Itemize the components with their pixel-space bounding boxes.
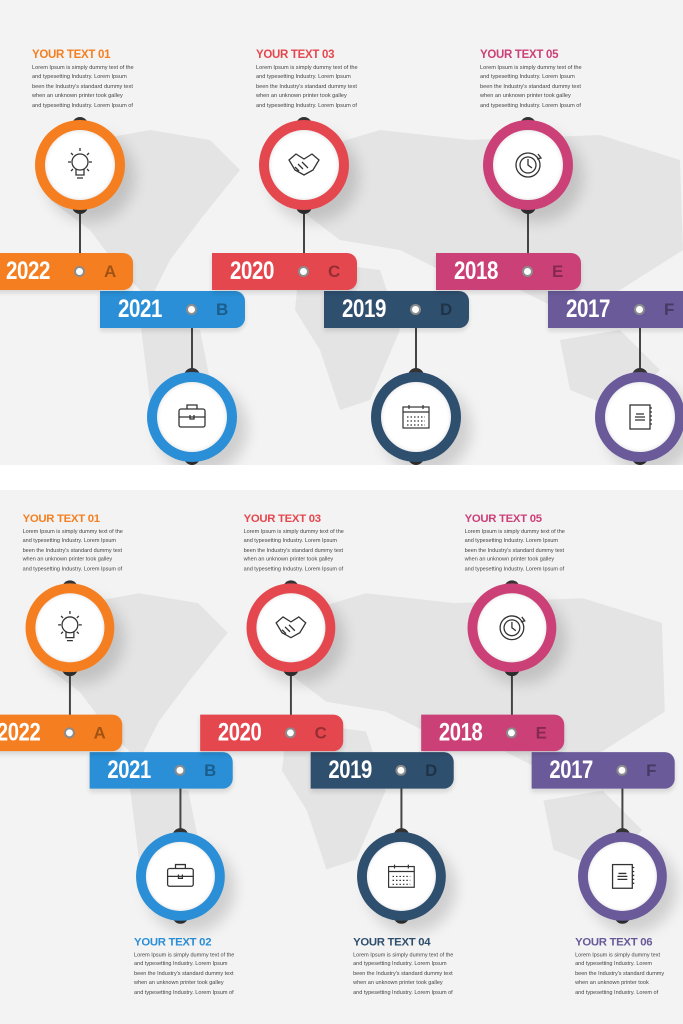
bar 2017: F	[664, 300, 674, 319]
bar 2018: E	[552, 262, 563, 281]
icon circle: lightbulb	[26, 583, 114, 672]
text block 01: when an unknown printer took galley	[32, 93, 123, 99]
text block 05	[480, 49, 582, 109]
text block 05	[464, 513, 565, 572]
text block 06	[592, 478, 683, 540]
bar 2017: F	[646, 761, 656, 780]
text block 06: Lorem Ipsum is simply dummy text	[575, 952, 660, 958]
text block 04	[353, 937, 454, 995]
bar 2020: 2020	[218, 719, 261, 746]
text block 03: and typesetting Industry. Lorem Ipsum	[256, 74, 351, 80]
bar 2018	[421, 715, 564, 751]
text block 04: and typesetting Industry. Lorem Ipsum	[353, 962, 447, 968]
text block 01: been the Industry's standard dummy text	[23, 548, 122, 554]
text block 03: and typesetting Industry. Lorem Ipsum of	[256, 103, 357, 109]
text block 01: Lorem Ipsum is simply dummy text of the	[23, 529, 123, 535]
text block 02	[145, 478, 305, 540]
connector lines	[72, 117, 648, 465]
bar 2018: 2018	[439, 719, 482, 746]
text block 04: YOUR TEXT 04	[353, 937, 430, 948]
text block 01: Lorem Ipsum is simply dummy text of the	[32, 65, 134, 71]
bar 2017	[548, 291, 683, 328]
text block 01: and typesetting Industry. Lorem Ipsum	[32, 74, 127, 80]
text block 05: Lorem Ipsum is simply dummy text of the	[480, 65, 582, 71]
icon circle: briefcase	[136, 832, 225, 921]
bar 2020	[200, 715, 343, 751]
text block 04: when an unknown printer took galley	[353, 980, 443, 986]
bar 2017	[532, 752, 675, 789]
bar 2022: 2022	[6, 257, 50, 285]
world map background	[40, 594, 664, 909]
bar 2022	[0, 253, 133, 290]
text block 03: been the Industry's standard dummy text	[256, 84, 357, 90]
bar 2020: 2020	[230, 257, 274, 285]
icon circle: handshake	[247, 583, 335, 672]
text block 05: and typesetting Industry. Lorem Ipsum of	[480, 103, 581, 109]
bar 2019: D	[440, 300, 452, 319]
icon circle: handshake	[259, 120, 349, 210]
bar 2020	[212, 253, 357, 290]
bar 2021: 2021	[118, 295, 162, 323]
text block 02: YOUR TEXT 02	[134, 937, 211, 948]
icon circle: calendar	[357, 832, 446, 921]
text block 06: when an unknown printer took	[575, 980, 649, 986]
bar 2018	[436, 253, 581, 290]
text block 06	[575, 937, 664, 995]
text block 05: and typesetting Industry. Lorem Ipsum	[465, 538, 558, 544]
text block 01: when an unknown printer took galley	[23, 557, 112, 563]
text block 01: YOUR TEXT 01	[23, 513, 100, 525]
text block 02: when an unknown printer took galley	[134, 980, 224, 986]
text block 03: when an unknown printer took galley	[256, 93, 347, 99]
text block 03: Lorem Ipsum is simply dummy text of the	[244, 529, 344, 535]
text block 05: YOUR TEXT 05	[465, 513, 542, 525]
text block 05: been the Industry's standard dummy text	[465, 548, 564, 554]
bar 2022: A	[104, 262, 116, 281]
bar 2019	[324, 291, 469, 328]
icon circle: calendar	[371, 372, 461, 462]
text block 01	[32, 49, 134, 109]
text block 06: YOUR TEXT 06	[575, 937, 652, 948]
text block 02: and typesetting Industry. Lorem Ipsum	[134, 962, 228, 968]
bar 2022: A	[94, 723, 106, 742]
text block 03: and typesetting Industry. Lorem Ipsum of	[244, 566, 343, 572]
text block 04: and typesetting Industry. Lorem Ipsum of	[353, 990, 453, 995]
text block 04	[367, 478, 527, 540]
text block 04: been the Industry's standard dummy text	[353, 971, 453, 977]
text block 03	[244, 513, 344, 572]
connector lines	[62, 580, 630, 924]
text block 03: and typesetting Industry. Lorem Ipsum	[244, 538, 337, 544]
bar 2019: D	[425, 761, 437, 780]
text block 05: and typesetting Industry. Lorem Ipsum	[480, 74, 575, 80]
icon circle: briefcase	[147, 372, 237, 462]
text block 03: YOUR TEXT 03	[256, 49, 334, 61]
text block 06: and typesetting Industry. Lorem	[575, 962, 652, 968]
text block 02: and typesetting Industry. Lorem Ipsum of	[134, 990, 234, 995]
text block 05: when an unknown printer took galley	[465, 557, 554, 563]
icon circle: notebook	[595, 372, 683, 462]
bar 2021	[90, 752, 233, 789]
icon circle: clock	[468, 583, 556, 672]
text block 04: Lorem Ipsum is simply dummy text of the	[353, 952, 453, 958]
text block 05: and typesetting Industry. Lorem Ipsum of	[465, 566, 564, 572]
bar 2021	[100, 291, 245, 328]
icon circle: clock	[483, 120, 573, 210]
panel: top timeline	[0, 0, 683, 465]
text block 03: Lorem Ipsum is simply dummy text of the	[256, 65, 358, 71]
text block 02	[134, 937, 234, 995]
text block 01: and typesetting Industry. Lorem Ipsum of	[23, 566, 122, 572]
bar 2021: 2021	[107, 756, 151, 784]
text block 03: when an unknown printer took galley	[244, 557, 333, 563]
world map background	[50, 130, 683, 450]
panel: bottom timeline	[0, 490, 683, 1024]
bar 2020: C	[328, 262, 340, 281]
icon circle: notebook	[578, 832, 667, 921]
bar 2022	[0, 715, 122, 751]
icon circle: lightbulb	[35, 120, 125, 210]
text block 01: YOUR TEXT 01	[32, 49, 110, 61]
text block 01: and typesetting Industry. Lorem Ipsum of	[32, 103, 133, 109]
text block 02: been the Industry's standard dummy text	[134, 971, 234, 977]
bar 2018: 2018	[454, 257, 498, 285]
text block 03	[256, 49, 358, 109]
text block 05: been the Industry's standard dummy text	[480, 84, 581, 90]
text block 06: been the Industry's standard dummy	[575, 971, 664, 977]
text block 03: YOUR TEXT 03	[244, 513, 321, 525]
bar 2019: 2019	[342, 295, 386, 323]
text block 05: when an unknown printer took galley	[480, 93, 571, 99]
text block 01: been the Industry's standard dummy text	[32, 84, 133, 90]
bar 2019: 2019	[328, 756, 372, 784]
text block 06: and typesetting Industry. Lorem of	[575, 990, 658, 995]
bar 2020: C	[315, 723, 327, 742]
text block 01	[22, 513, 123, 572]
text block 03: been the Industry's standard dummy text	[244, 548, 343, 554]
text block 02: Lorem Ipsum is simply dummy text of the	[134, 952, 234, 958]
bar 2021: B	[216, 300, 228, 319]
text block 01: and typesetting Industry. Lorem Ipsum	[23, 538, 116, 544]
text block 05: YOUR TEXT 05	[480, 49, 558, 61]
bar 2019	[311, 752, 454, 789]
text block 05: Lorem Ipsum is simply dummy text of the	[465, 529, 565, 535]
bar 2017: 2017	[549, 756, 593, 784]
bar 2017: 2017	[566, 295, 610, 323]
bar 2021: B	[204, 761, 216, 780]
bar 2018: E	[536, 723, 547, 742]
